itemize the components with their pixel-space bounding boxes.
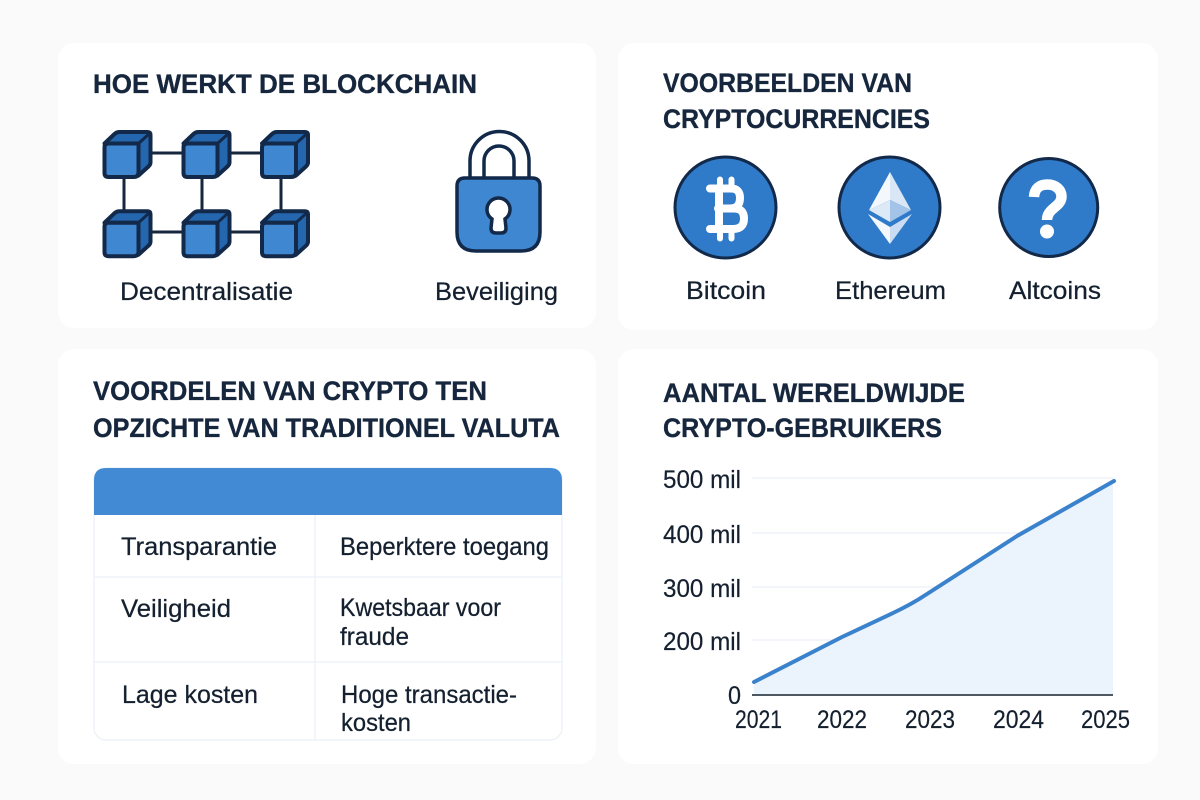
icon: bitcoin — [675, 157, 776, 258]
panel: voordelen van crypto — [58, 349, 596, 764]
heading: voorbeelden van cryptocurrencies: CRYPTOCURRENCIES — [663, 104, 930, 134]
label: ethereum: Ethereum — [835, 277, 946, 305]
icon: altcoins question mark — [1000, 158, 1098, 256]
panel: hoe werkt de blockchain — [58, 43, 596, 328]
y axis labels: 500 mil — [663, 466, 741, 494]
y axis labels: 300 mil — [663, 575, 741, 603]
row: lage kosten: Hoge transactie- — [341, 681, 517, 709]
area under line — [754, 481, 1113, 694]
x axis labels — [735, 706, 1130, 734]
table header — [94, 468, 562, 515]
heading: hoe werkt de blockchain: HOE WERKT DE BLOCKCHAIN — [93, 69, 477, 99]
y axis labels: 0 — [728, 682, 741, 710]
x axis labels: 2021 — [735, 706, 782, 734]
row: veiligheid — [121, 594, 501, 651]
y axis labels: 400 mil — [663, 521, 741, 549]
x axis labels: 2023 — [905, 706, 955, 734]
comparison table — [94, 468, 562, 740]
label: altcoins: Altcoins — [1009, 277, 1101, 305]
label: bitcoin: Bitcoin — [686, 277, 766, 305]
row: transparantie: Beperktere toegang — [340, 533, 549, 561]
heading: aantal wereldwijde crypto-gebruikers: AANTAL WERELDWIJDE — [663, 378, 965, 408]
row: veiligheid: Veiligheid — [121, 595, 231, 623]
icon: ethereum — [839, 157, 940, 258]
row: lage kosten: kosten — [341, 709, 411, 737]
row: lage kosten: Lage kosten — [122, 681, 258, 709]
x axis labels: 2024 — [993, 706, 1044, 734]
y axis labels: 200 mil — [663, 628, 741, 656]
line chart: crypto users 2021-2025 — [663, 466, 1130, 734]
icon: padlock — [457, 132, 540, 251]
heading: voordelen van crypto: OPZICHTE VAN TRADITIONEL VALUTA — [93, 413, 560, 443]
row: veiligheid: fraude — [340, 623, 409, 651]
row: transparantie: Transparantie — [121, 533, 277, 561]
row: lage kosten — [122, 681, 517, 737]
heading: voorbeelden van cryptocurrencies: VOORBEELDEN VAN — [663, 68, 912, 98]
x axis labels: 2022 — [817, 706, 867, 734]
heading: voordelen van crypto: VOORDELEN VAN CRYPTO TEN — [93, 376, 487, 406]
heading: aantal wereldwijde crypto-gebruikers: CRYPTO-GEBRUIKERS — [663, 413, 942, 443]
y axis labels — [663, 466, 741, 710]
row: transparantie — [121, 533, 549, 561]
row: veiligheid: Kwetsbaar voor — [340, 594, 501, 622]
panel: aantal wereldwijde crypto-gebruikers — [618, 349, 1158, 764]
x axis labels: 2025 — [1081, 706, 1130, 734]
icon: blockchain network — [104, 132, 308, 256]
label: decentralisatie: Decentralisatie — [120, 278, 293, 306]
panel: voorbeelden van cryptocurrencies — [618, 43, 1158, 330]
data line — [754, 481, 1114, 682]
label: beveiliging: Beveiliging — [435, 278, 558, 306]
